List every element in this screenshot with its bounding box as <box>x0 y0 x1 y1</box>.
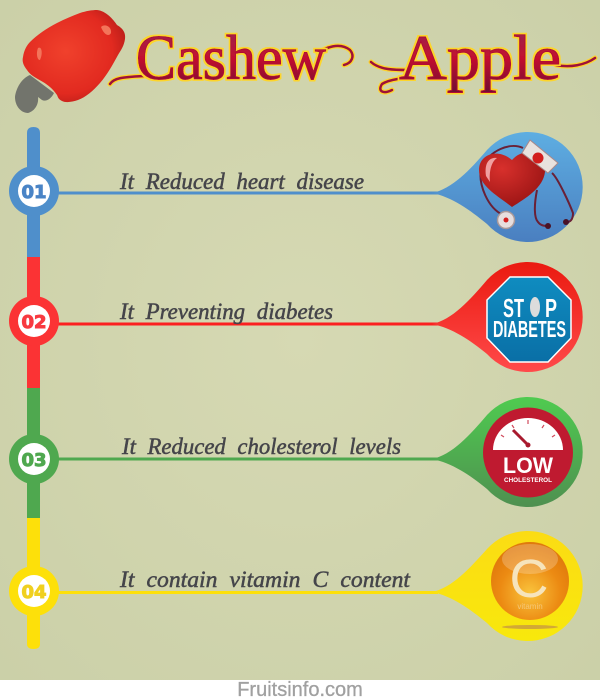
title <box>110 23 595 93</box>
label: It Reduced cholesterol levels <box>121 434 401 459</box>
connector line <box>58 591 438 594</box>
pin <box>432 132 583 242</box>
title: Cashew <box>136 23 326 93</box>
icon: low cholesterol gauge: LOW <box>503 453 553 478</box>
icon: stop diabetes sign: ST <box>503 293 524 323</box>
marker 01 <box>9 166 59 216</box>
label: It Reduced heart disease <box>119 169 364 194</box>
marker 04 <box>9 566 59 616</box>
pin <box>432 397 583 507</box>
icon: vitamin C sphere <box>491 542 569 629</box>
icon: stop diabetes sign: P <box>545 293 557 323</box>
marker 04: 04 <box>21 582 47 603</box>
title: Apple <box>399 23 561 93</box>
icon: low cholesterol gauge: CHOLESTEROL <box>504 477 552 484</box>
icon: vitamin C sphere: C <box>510 549 548 609</box>
connector line <box>58 192 438 194</box>
item 02 <box>9 262 583 372</box>
icon: heart with stethoscope <box>479 140 573 229</box>
pin <box>432 531 583 641</box>
timeline spine <box>27 127 40 649</box>
icon: vitamin C sphere: vitamin <box>517 602 543 611</box>
icon: stop diabetes sign <box>487 277 571 362</box>
icon: low cholesterol gauge <box>483 408 573 498</box>
connector line <box>58 322 438 326</box>
marker 02: 02 <box>21 312 47 333</box>
marker 01: 01 <box>21 182 47 203</box>
marker 03 <box>9 434 59 484</box>
connector line <box>58 458 438 460</box>
item 04 <box>9 531 583 641</box>
label: It contain vitamin C content <box>119 567 411 592</box>
marker 03: 03 <box>21 450 47 471</box>
label: It Preventing diabetes <box>119 299 333 324</box>
pin <box>432 262 583 372</box>
icon: cashew apple <box>15 10 125 113</box>
item 01 <box>9 132 583 242</box>
item 03 <box>9 397 583 507</box>
marker 02 <box>9 296 59 346</box>
